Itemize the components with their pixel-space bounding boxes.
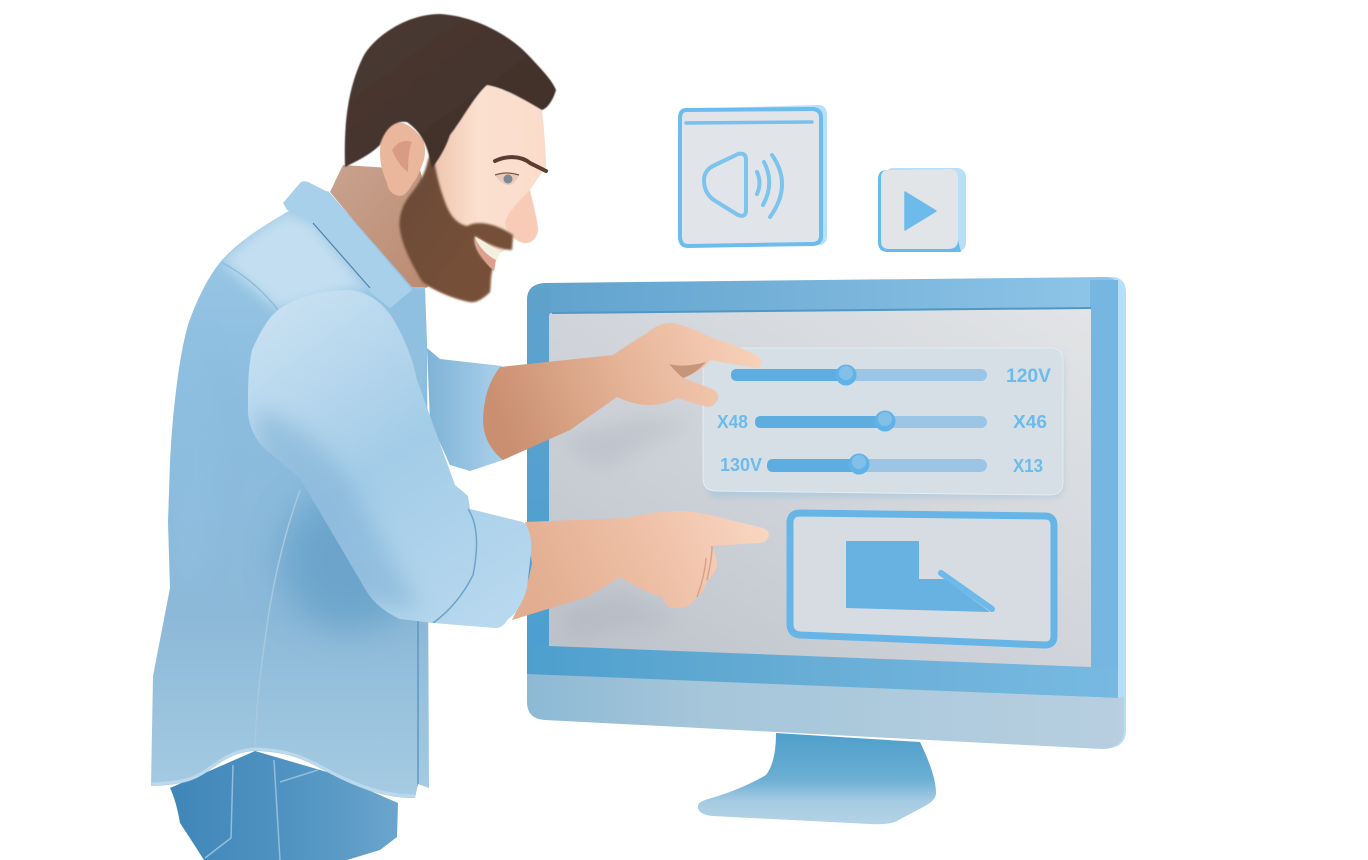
monitor: [527, 277, 1126, 749]
shirt body: [151, 191, 429, 798]
monitor side edge: [1100, 277, 1126, 748]
illustration: man adjusting controls on a monitor: [151, 13, 1126, 860]
beard: [399, 150, 513, 302]
slider 1 label: 120V: [1006, 366, 1051, 387]
face: [410, 85, 546, 302]
icon: speaker window card: [678, 105, 827, 247]
eye: [495, 173, 519, 185]
slider 2: [755, 410, 987, 432]
mouth: [475, 237, 500, 261]
hair: [345, 14, 556, 168]
monitor screen: [549, 308, 1091, 667]
slider 3 left label: 130V: [720, 455, 762, 475]
shirt collar: [283, 181, 427, 405]
monitor frame: [527, 277, 1118, 698]
icon: play button card: [878, 168, 966, 252]
monitor stand: [698, 733, 936, 824]
eyebrow: [495, 157, 546, 171]
slider 3 right label: X13: [1013, 456, 1043, 476]
control panel with sliders: [703, 348, 1064, 498]
near arm forearm and pointing hand: [512, 511, 769, 620]
arm shadows on the screen: [560, 415, 700, 640]
jeans: [170, 751, 398, 860]
slider 1: [731, 364, 987, 386]
image placeholder shape: [846, 541, 990, 612]
far arm sleeve: [427, 348, 503, 471]
icon: speaker with sound waves: [704, 154, 782, 217]
slider 2 right label: X46: [1013, 412, 1047, 432]
icon: play triangle: [905, 192, 936, 230]
man: [151, 14, 769, 860]
neck: [330, 165, 440, 292]
slider 2 left label: X48: [717, 412, 748, 432]
nose: [505, 190, 538, 243]
monitor chin: [527, 674, 1124, 749]
image placeholder box: [790, 513, 1054, 645]
near arm sleeve: [248, 290, 531, 628]
slider 3: [767, 454, 987, 474]
ear: [380, 122, 425, 196]
far arm and hand: [483, 323, 762, 460]
